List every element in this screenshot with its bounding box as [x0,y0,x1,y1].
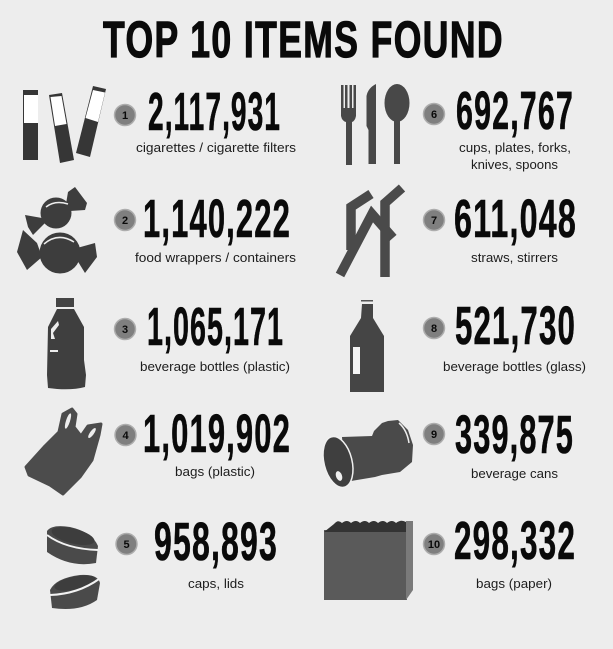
badge 9 [424,424,444,444]
item 8: glass bottles [350,296,586,392]
badge 5: 5 [123,539,130,551]
badge 10: 10 [428,539,440,551]
badge 10 [424,534,444,554]
icon: caps [47,523,100,609]
icon: crushed can [318,420,413,491]
badge 4: 4 [122,430,129,442]
item 10: paper bags [324,511,576,600]
label 2: food wrappers / containers [135,250,297,265]
badge 3: 3 [122,324,128,336]
badge 7: 7 [431,215,437,227]
icon: candies [17,187,97,274]
label 8: beverage bottles (glass) [443,359,586,374]
label 6: knives, spoons [471,157,558,172]
icon: straws [340,188,402,277]
badge 4 [115,424,136,446]
item 9: cans [318,405,574,491]
badge 8 [424,318,444,338]
icon: paper bag [324,521,413,600]
icon: glass bottle [350,300,384,392]
label 6 [459,140,571,172]
number 4: 1,019,902 [143,404,291,464]
number 3: 1,065,171 [147,297,284,357]
badge 3 [114,318,136,340]
label 6: cups, plates, forks, [459,140,571,155]
item 5: caps and lids [47,512,278,609]
label 3: beverage bottles (plastic) [140,359,290,374]
icon: cigarettes [23,86,106,163]
badge 6 [424,104,444,124]
label 4: bags (plastic) [175,464,255,479]
item 7: straws [340,188,577,277]
item 4: plastic bags [26,404,291,494]
number 5: 958,893 [154,512,278,572]
label 1: cigarettes / cigarette filters [136,140,297,155]
icon: fork, knife, spoon [341,84,410,165]
badge 2 [114,210,136,230]
icon: plastic bag [26,409,101,494]
item 1: cigarettes [23,82,297,163]
number 1: 2,117,931 [148,82,281,142]
badge 1 [114,104,136,126]
label 7: straws, stirrers [471,250,559,265]
badge 8: 8 [431,323,437,335]
number 2: 1,140,222 [143,189,291,249]
label 9: beverage cans [471,466,559,481]
item 6: cutlery [341,81,574,172]
badge 5 [116,534,137,554]
label 5: caps, lids [188,576,245,591]
item 2: food wrappers [17,187,297,274]
item 3: plastic bottles [47,297,290,389]
badge 6: 6 [431,109,437,121]
badge 2: 2 [122,215,128,227]
badge 7 [424,210,444,230]
badge 9: 9 [431,429,437,441]
icon: plastic bottle [47,298,86,389]
label 10: bags (paper) [476,576,552,591]
badge 1: 1 [122,110,128,122]
